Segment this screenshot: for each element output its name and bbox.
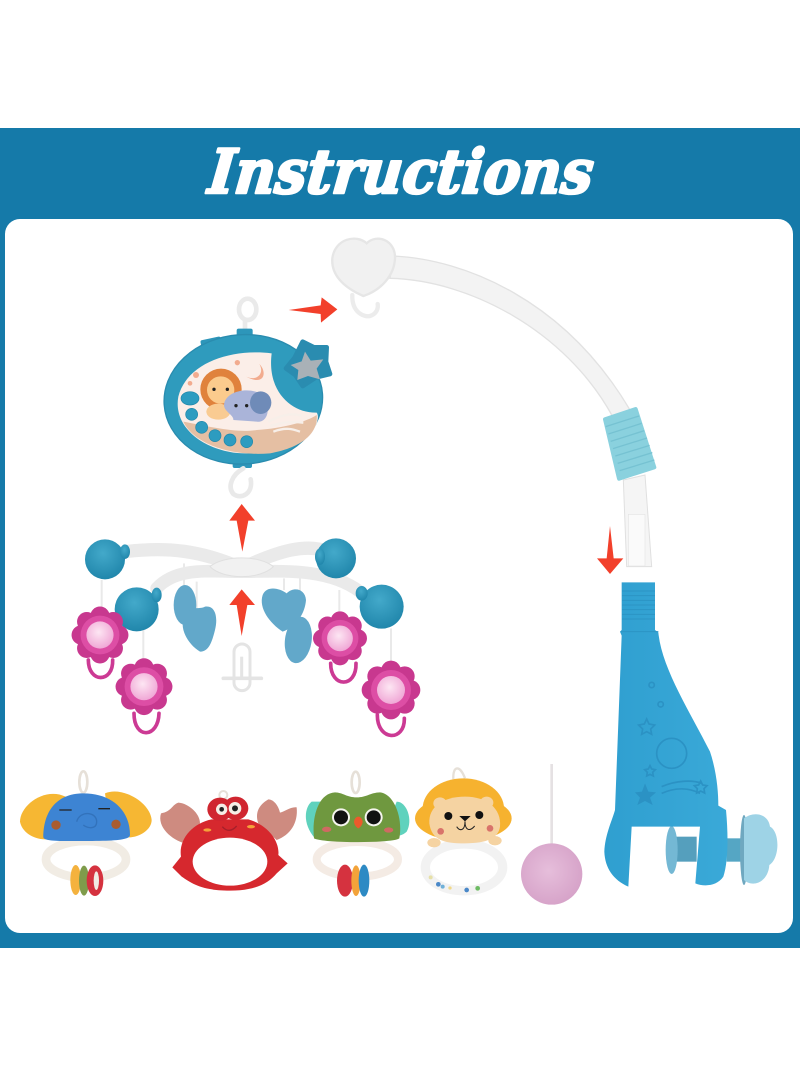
music box hanging ring: [239, 299, 256, 329]
star button: [286, 342, 330, 386]
clamp neck ribs: [621, 591, 658, 632]
music box: [160, 329, 330, 469]
tail swirl: [268, 414, 303, 432]
center hub: [210, 558, 273, 577]
arrow: down into clamp: [597, 526, 623, 574]
blue background band: [0, 128, 800, 948]
clamp knob: [744, 814, 777, 884]
music box bottom hook: [231, 468, 251, 496]
white mobile arms: [125, 548, 360, 592]
curved white arm: [390, 256, 630, 416]
pink flower 2: [116, 658, 172, 733]
panel: white instructions area: [5, 219, 793, 933]
arrow: clip to mobile hub: [229, 589, 255, 636]
lion picture: [200, 369, 242, 420]
pink pull ball: [521, 764, 582, 905]
elephant and crab rattles: [20, 771, 297, 896]
blue mobile balls: [85, 538, 404, 631]
pink flower 4: [362, 661, 420, 735]
moon and dots decoration: [188, 360, 264, 386]
mobile assembly: [72, 504, 420, 735]
pink flower 1: [72, 607, 128, 677]
clamp screw and plate: [666, 815, 748, 885]
moon-shaped picture face: [178, 352, 318, 454]
white clip: [223, 644, 261, 691]
arrow: music box to arm hook: [289, 297, 337, 323]
clamp body: [604, 582, 728, 887]
music box unit: [160, 297, 337, 496]
owl, lion rattles and pull ball: [306, 764, 582, 905]
lion rattle: [415, 768, 512, 892]
owl rattle: [306, 772, 409, 897]
sandy ground: [183, 415, 317, 454]
heart-shaped arm end: [332, 239, 395, 296]
blue hanging hearts: [174, 585, 315, 665]
crib arm: [332, 239, 654, 574]
elephant rattle: [20, 771, 152, 896]
lower arm connector: [623, 475, 652, 567]
crab rattle: [160, 791, 297, 891]
clamp base: [604, 582, 777, 887]
pink flower 3: [313, 611, 367, 682]
music box buttons: [181, 392, 253, 448]
embossed stars and moon: [635, 682, 707, 805]
teal ribbed sleeve: [605, 409, 654, 479]
title: Instructions: [204, 137, 597, 208]
arm hook: [352, 295, 378, 316]
strings: [102, 563, 391, 663]
elephant picture: [224, 390, 271, 422]
arrow: mobile arms to music box: [229, 504, 255, 552]
